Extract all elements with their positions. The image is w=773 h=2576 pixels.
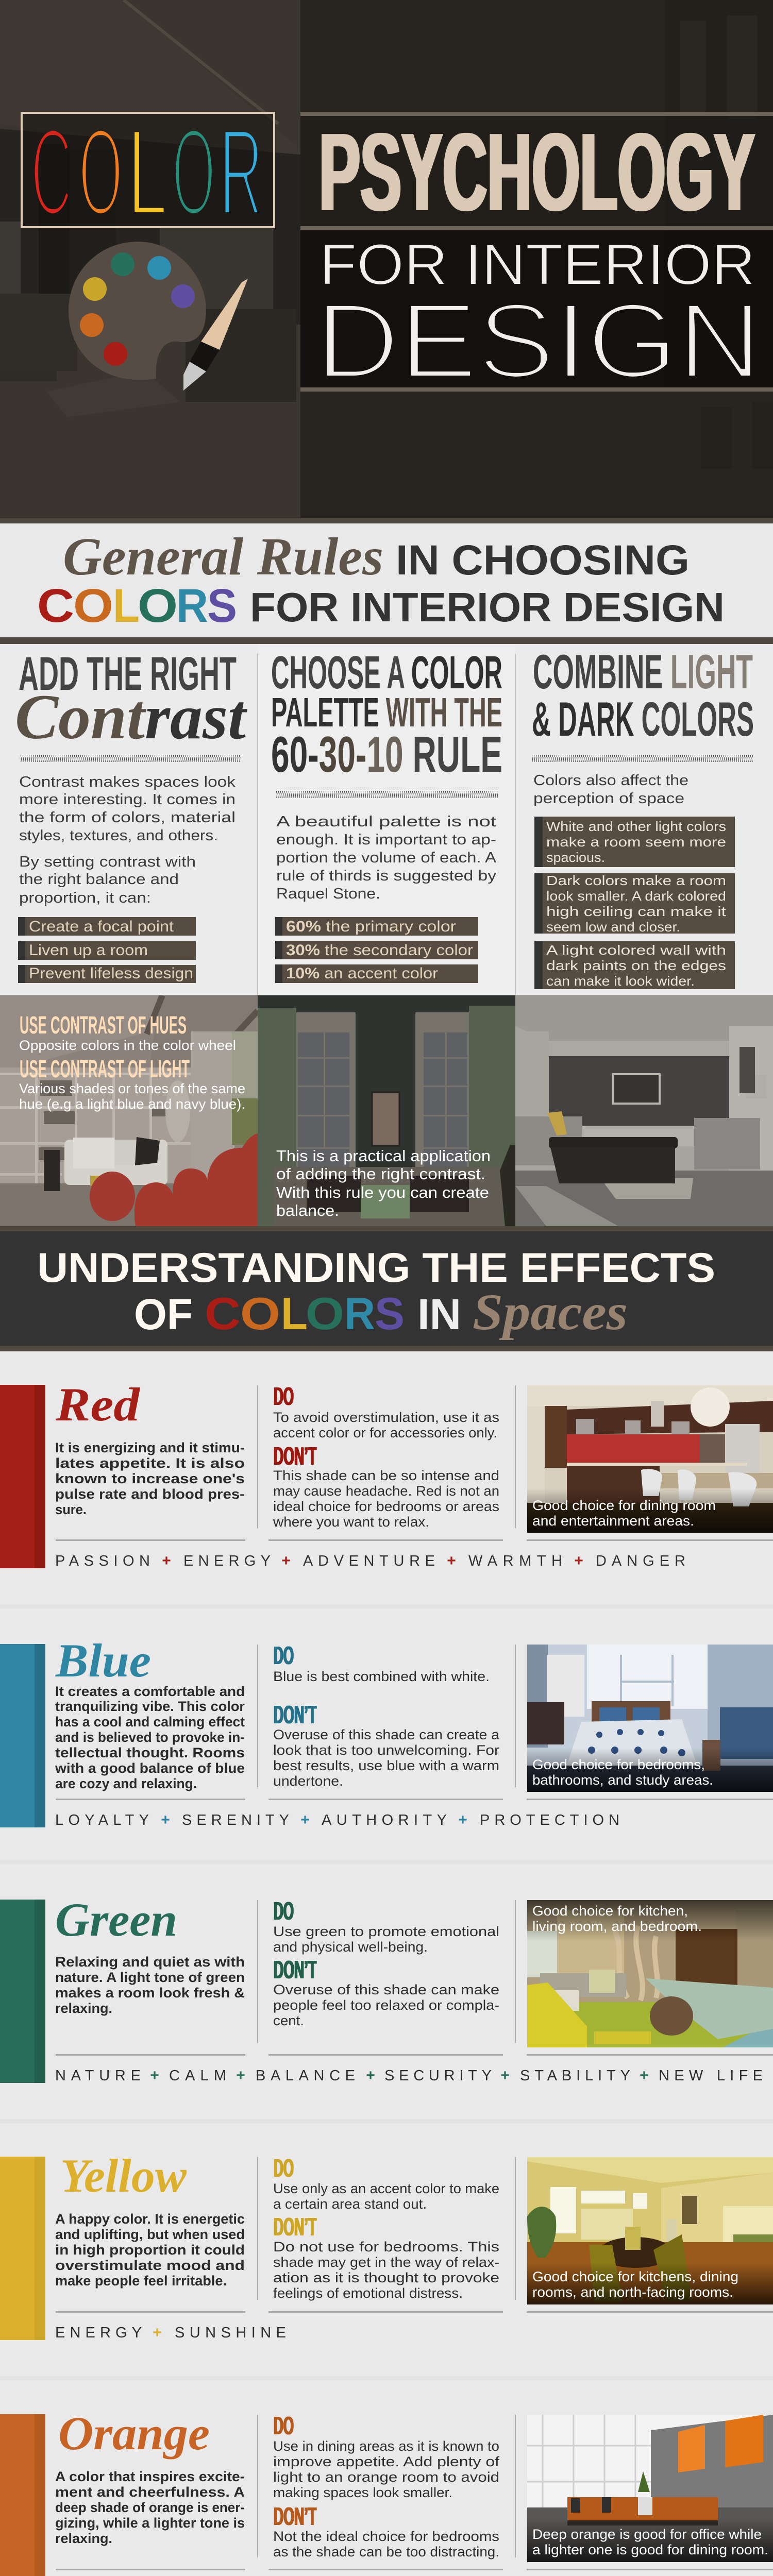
description: lates appetite. It is also [55, 1455, 245, 1471]
callout: light colors: spacious. [546, 850, 605, 865]
do: DO [274, 1383, 294, 1411]
column dividers and rules [56, 2415, 773, 2570]
do: Use in dining areas as it is known to [273, 2438, 499, 2454]
description: A happy color. It is energetic [55, 2211, 245, 2227]
keywords: BALANCE [256, 2067, 355, 2084]
keywords [55, 2324, 286, 2341]
heading line 2: IN [417, 1290, 461, 1338]
callout: light colors: make a room seem more [546, 834, 726, 850]
hatch divider [20, 755, 241, 762]
description: It creates a comfortable and [55, 1684, 245, 1699]
keywords: DANGER [596, 1553, 685, 1569]
photo caption [532, 2527, 768, 2557]
don't: feelings of emotional distress. [273, 2285, 463, 2301]
don't: where you want to relax. [273, 1514, 429, 1530]
body text: By setting contrast with [19, 854, 196, 870]
body text: proportion, it can: [19, 890, 151, 906]
list item: 10%: 10% an accent color [286, 965, 438, 982]
don't: Overuse of this shade can create a [273, 1727, 500, 1742]
section: understanding the effects heading [0, 1226, 773, 2576]
color bar [0, 1644, 45, 1827]
list item: liven up a room: Liven up a room [29, 942, 148, 959]
title word: COLOR in framed box: R [220, 103, 263, 242]
do: light to an orange room to avoid [273, 2469, 499, 2485]
list item: 30%: 30% the secondary color [286, 942, 473, 959]
don't: DON’T [274, 2503, 316, 2531]
do: DO [274, 1642, 294, 1670]
do: DO [274, 2412, 294, 2440]
panel: orange [0, 2407, 773, 2576]
do: DO [274, 2155, 294, 2182]
panel: yellow [0, 2149, 773, 2341]
callout: dark colors: high ceiling can make it [546, 904, 727, 919]
hatch divider [532, 755, 753, 762]
body text [533, 772, 688, 807]
heading line 2: L [281, 1288, 308, 1339]
description: overstimulate mood and [55, 2258, 245, 2273]
keywords: PROTECTION [480, 1812, 619, 1828]
heading background and bars [0, 518, 773, 644]
column heading: 60-30-10 RULE [271, 726, 502, 783]
keywords: + [150, 2067, 159, 2084]
description: and uplifting, but when used [55, 2227, 245, 2242]
do [273, 1897, 499, 1955]
keywords: ENERGY [183, 1553, 271, 1569]
do: Use green to promote emotional [273, 1924, 499, 1939]
description: with a good balance of blue [55, 1760, 245, 1776]
callout: dark colors: Dark colors make a room [546, 873, 726, 888]
photo caption [532, 1757, 713, 1788]
strip text: contrast of hues and light [19, 1012, 245, 1112]
description: tranquilizing vibe. This color [55, 1699, 245, 1714]
strip text: contrast of hues and light: hue (e.g a light blue and navy blue). [19, 1096, 245, 1112]
strip text: practical application: of adding the right contrast. [276, 1165, 485, 1183]
callout: light colors [534, 817, 735, 867]
description: nature. A light tone of green [55, 1970, 245, 1985]
column heading: CHOOSE A COLOR [271, 647, 502, 699]
photo caption: rooms, and north-facing rooms. [532, 2284, 733, 2300]
keywords: + [236, 2067, 245, 2084]
strip text: contrast of hues and light: USE CONTRAST OF HUES [20, 1012, 187, 1039]
photo: room with red chair [0, 995, 258, 1226]
heading line 2: OF [134, 1290, 193, 1338]
keywords: NATURE [55, 2067, 141, 2084]
do: Use only as an accent color to make [273, 2181, 499, 2196]
panel: 60-30-10 rule [271, 647, 502, 983]
don't: people feel too relaxed or compla- [273, 1997, 499, 2013]
strip text: contrast of hues and light: Various shades or tones of the same [19, 1081, 245, 1096]
don't: DON’T [274, 2213, 316, 2241]
body text: rule of thirds is suggested by [276, 868, 497, 884]
don't: ation as it is thought to provoke [273, 2270, 499, 2285]
color bar [0, 2414, 45, 2576]
callout: light colors: White and other light colors [546, 819, 726, 834]
photo: grey living room [515, 995, 773, 1226]
band rules [300, 112, 773, 392]
title words: FOR INTERIOR: FOR INTERIOR [320, 232, 755, 297]
do: a certain area stand out. [273, 2196, 427, 2212]
don't: ideal choice for bedrooms or areas [273, 1499, 499, 1514]
photo caption: Good choice for kitchen, [532, 1903, 688, 1919]
do: accent color or for accessories only. [273, 1425, 497, 1440]
description: and is believed to provoke in- [55, 1730, 245, 1745]
body text: portion the volume of each. A [276, 850, 497, 866]
heading line 2: O [138, 580, 178, 632]
keywords: + [640, 2067, 649, 2084]
title word: COLOR in framed box: C [31, 103, 72, 242]
column dividers and rules [56, 1385, 773, 1541]
description: has a cool and calming effect [55, 1714, 245, 1730]
don't: best results, use blue with a warm [273, 1758, 499, 1773]
color name: Red [55, 1378, 141, 1431]
title word: COLOR in framed box: L [128, 103, 167, 242]
panel: green [0, 1893, 773, 2084]
description: ment and cheerfulness. A [55, 2484, 245, 2500]
callout: dark colors: look smaller. A dark colored [546, 888, 726, 904]
don't: cent. [273, 2013, 304, 2028]
heading line 2 [134, 1283, 628, 1341]
description: pulse rate and blood pres- [55, 1486, 245, 1502]
heading line 2: C [205, 1288, 241, 1339]
description: Relaxing and quiet as with [55, 1954, 245, 1970]
don't: shade may get in the way of relax- [273, 2255, 499, 2270]
heading line 1 [63, 527, 690, 586]
body text: more interesting. It comes in [19, 791, 236, 808]
heading line 1: General Rules [63, 527, 383, 586]
heading line 2: Spaces [473, 1283, 628, 1341]
description [55, 1954, 245, 2016]
list item: liven up a room [18, 941, 196, 960]
keywords: NEW LIFE [659, 2067, 763, 2084]
body text: Raquel Stone. [276, 886, 380, 902]
description [55, 1440, 245, 1517]
heading line 2: C [37, 580, 74, 632]
column dividers and rules [56, 1900, 773, 2056]
keywords: + [574, 1552, 583, 1569]
keywords: + [153, 2324, 162, 2341]
don't: Not the ideal choice for bedrooms [273, 2529, 499, 2544]
description: make people feel irritable. [55, 2273, 227, 2289]
color bar [0, 1900, 45, 2083]
column backgrounds [0, 644, 773, 996]
description: gizing, while a lighter tone is [55, 2515, 245, 2531]
description: A color that inspires excite- [55, 2469, 245, 2484]
do [273, 1642, 490, 1684]
photo caption: a lighter one is good for dining room. [532, 2542, 768, 2557]
column heading [271, 647, 502, 783]
photo: orange office [527, 2415, 773, 2562]
description: It is energizing and it stimu- [55, 1440, 245, 1455]
body text: Contrast makes spaces look [19, 774, 236, 790]
photo caption [532, 2269, 738, 2300]
do: and physical well-being. [273, 1939, 428, 1955]
keywords: SUNSHINE [175, 2325, 286, 2341]
title word: COLOR in framed box: O [79, 103, 123, 242]
heading line 2: S [375, 1288, 405, 1339]
column dividers and rules [56, 1645, 773, 1800]
don't: DON’T [274, 1443, 316, 1470]
callout: light wall [534, 941, 735, 989]
don't: may cause headache. Red is not an [273, 1483, 499, 1499]
do: Blue is best combined with white. [273, 1669, 490, 1684]
panel: add the right contrast [15, 648, 248, 983]
section: photo strip [0, 995, 773, 1226]
strip text: contrast of hues and light: USE CONTRAST OF LIGHT [20, 1056, 190, 1083]
color name: Blue [55, 1634, 151, 1687]
column heading: Contrast [15, 682, 248, 752]
hero background: darkened living room photo [0, 0, 773, 518]
do [273, 2412, 500, 2500]
body text: the form of colors, material [19, 809, 236, 826]
keywords: + [161, 1811, 170, 1828]
keywords: + [458, 1811, 467, 1828]
description [55, 2469, 245, 2546]
description: are cozy and relaxing. [55, 1776, 197, 1791]
list item: create a focal point [18, 917, 196, 936]
title word: COLOR in framed box [22, 103, 274, 242]
description: relaxing. [55, 2531, 112, 2546]
title word: COLOR in framed box: O [172, 103, 215, 242]
heading line 2: S [207, 580, 237, 632]
heading line 2: R [176, 580, 208, 632]
description: in high proportion it could [55, 2242, 245, 2258]
strip text: practical application [276, 1147, 491, 1219]
strip text: contrast of hues and light: Opposite colors in the color wheel [19, 1038, 236, 1053]
heading line 2: R [344, 1288, 375, 1339]
color bar [0, 1385, 45, 1568]
hatch divider [276, 791, 498, 798]
photo caption: Good choice for dining room [532, 1498, 716, 1513]
keywords [55, 2067, 763, 2084]
don't: as the shade can be too distracting. [273, 2544, 499, 2560]
keywords [55, 1552, 685, 1569]
photo caption [532, 1903, 702, 1934]
don't: DON’T [274, 1701, 316, 1729]
heading line 2: O [306, 1288, 344, 1339]
column heading [15, 648, 248, 752]
color name: Orange [58, 2407, 210, 2460]
body text: enough. It is important to ap- [276, 832, 496, 848]
column dividers and rules [56, 2157, 773, 2313]
callout: light wall: A light colored wall with [546, 942, 726, 958]
description [55, 2211, 245, 2289]
hero panel [0, 0, 773, 518]
column heading: PALETTE WITH THE [271, 689, 502, 735]
list item: 60% [275, 917, 478, 936]
callout: light wall: can make it look wider. [546, 973, 695, 989]
don't: Overuse of this shade can make [273, 1982, 499, 1997]
body text: perception of space [533, 790, 684, 807]
do [273, 1383, 499, 1440]
icon: paint palette [69, 242, 206, 380]
description: sure. [55, 1502, 87, 1517]
don't [273, 1443, 499, 1530]
section: three rule columns [0, 644, 773, 996]
heading bands [0, 1226, 773, 2576]
keywords: + [500, 2067, 510, 2084]
column heading [532, 645, 754, 746]
photo caption [532, 1498, 716, 1529]
heading line 2: O [240, 1288, 280, 1339]
callout: dark colors [534, 873, 735, 935]
photo caption: Deep orange is good for office while [532, 2527, 762, 2542]
body text [19, 774, 236, 906]
title word: DESIGN: DESIGN [315, 281, 762, 401]
strip text: practical application: balance. [276, 1201, 339, 1219]
panel: combine light and dark colors [532, 645, 754, 989]
column heading: ADD THE RIGHT [19, 648, 237, 700]
description: known to increase one's [55, 1471, 245, 1486]
photo caption: and entertainment areas. [532, 1513, 694, 1529]
keywords: SERENITY [182, 1812, 289, 1828]
don't [273, 2503, 499, 2560]
heading line 2 [37, 580, 725, 632]
keywords: PASSION [55, 1553, 150, 1569]
photo caption: Good choice for bedrooms, [532, 1757, 705, 1772]
heading line 2: L [113, 580, 140, 632]
do: DO [274, 1897, 294, 1925]
don't: This shade can be so intense and [273, 1468, 499, 1483]
section: general rules heading [0, 518, 773, 644]
don't [273, 2213, 499, 2301]
color name: Yellow [60, 2149, 187, 2202]
strip text: practical application: This is a practical application [276, 1147, 491, 1165]
keywords: + [162, 1552, 171, 1569]
heading line 2: O [73, 580, 113, 632]
photo caption: living room, and bedroom. [532, 1919, 702, 1934]
don't: Do not use for bedrooms. This [273, 2239, 499, 2255]
keywords: CALM [169, 2067, 226, 2084]
don't: undertone. [273, 1773, 343, 1789]
keywords: + [281, 1552, 291, 1569]
don't: look that is too unwelcoming. For [273, 1742, 499, 1758]
don't [273, 1956, 499, 2028]
panel: blue [0, 1634, 773, 1828]
description: makes a room look fresh & [55, 1985, 245, 2001]
keywords: + [300, 1811, 310, 1828]
heading line 1: UNDERSTANDING THE EFFECTS [37, 1245, 715, 1291]
keywords: AUTHORITY [322, 1812, 447, 1828]
heading line 2: FOR INTERIOR DESIGN [250, 584, 725, 630]
keywords: SECURITY [384, 2067, 492, 2084]
callout: light wall: dark paints on the edges [546, 958, 726, 973]
keywords: STABILITY [520, 2067, 630, 2084]
keywords: LOYALTY [55, 1812, 149, 1828]
description [55, 1684, 245, 1791]
body text [276, 814, 497, 902]
callout: dark colors: seem low and closer. [546, 919, 680, 935]
keywords: ENERGY [55, 2325, 142, 2341]
title band: for interior design [300, 230, 773, 387]
keywords: ADVENTURE [303, 1553, 435, 1569]
list item: prevent lifeless design: Prevent lifeless design [29, 965, 193, 982]
do: improve appetite. Add plenty of [273, 2454, 500, 2469]
don't [273, 1701, 500, 1789]
keywords [55, 1811, 619, 1828]
body text: the right balance and [19, 871, 179, 888]
list item: 60%: 60% the primary color [286, 918, 456, 935]
do: To avoid overstimulation, use it as [273, 1410, 499, 1425]
strip text: practical application: With this rule you can create [276, 1183, 489, 1201]
keywords: + [447, 1552, 456, 1569]
do: making spaces look smaller. [273, 2485, 452, 2500]
description: relaxing. [55, 2001, 112, 2016]
description: deep shade of orange is ener- [55, 2500, 245, 2515]
color bar [0, 2157, 45, 2340]
section dividers [0, 1604, 773, 2576]
photo: blue bedroom [527, 1645, 773, 1792]
keywords: WARMTH [468, 1553, 562, 1569]
body text: styles, textures, and others. [19, 827, 218, 844]
title band: psychology [300, 116, 773, 227]
photo: dark wall with green curtains [258, 995, 515, 1226]
body text: Colors also affect the [533, 772, 688, 789]
photo: green living room [527, 1900, 773, 2047]
photo caption: Good choice for kitchens, dining [532, 2269, 738, 2284]
do [273, 2155, 499, 2212]
body text: A beautiful palette is not [276, 814, 496, 830]
list item: 10% [275, 964, 478, 983]
keywords: + [366, 2067, 375, 2084]
photo caption: bathrooms, and study areas. [532, 1772, 713, 1788]
heading line 1: IN CHOOSING [396, 537, 690, 584]
don't: DON’T [274, 1956, 316, 1984]
panel: red [0, 1378, 773, 1569]
icon: paint brush [183, 279, 248, 391]
color name: Green [55, 1893, 177, 1946]
description: tellectual thought. Rooms [55, 1745, 245, 1760]
photo: yellow dining room [527, 2157, 773, 2304]
photo: kitchen [527, 1385, 773, 1533]
list item: create a focal point: Create a focal point [29, 918, 174, 935]
